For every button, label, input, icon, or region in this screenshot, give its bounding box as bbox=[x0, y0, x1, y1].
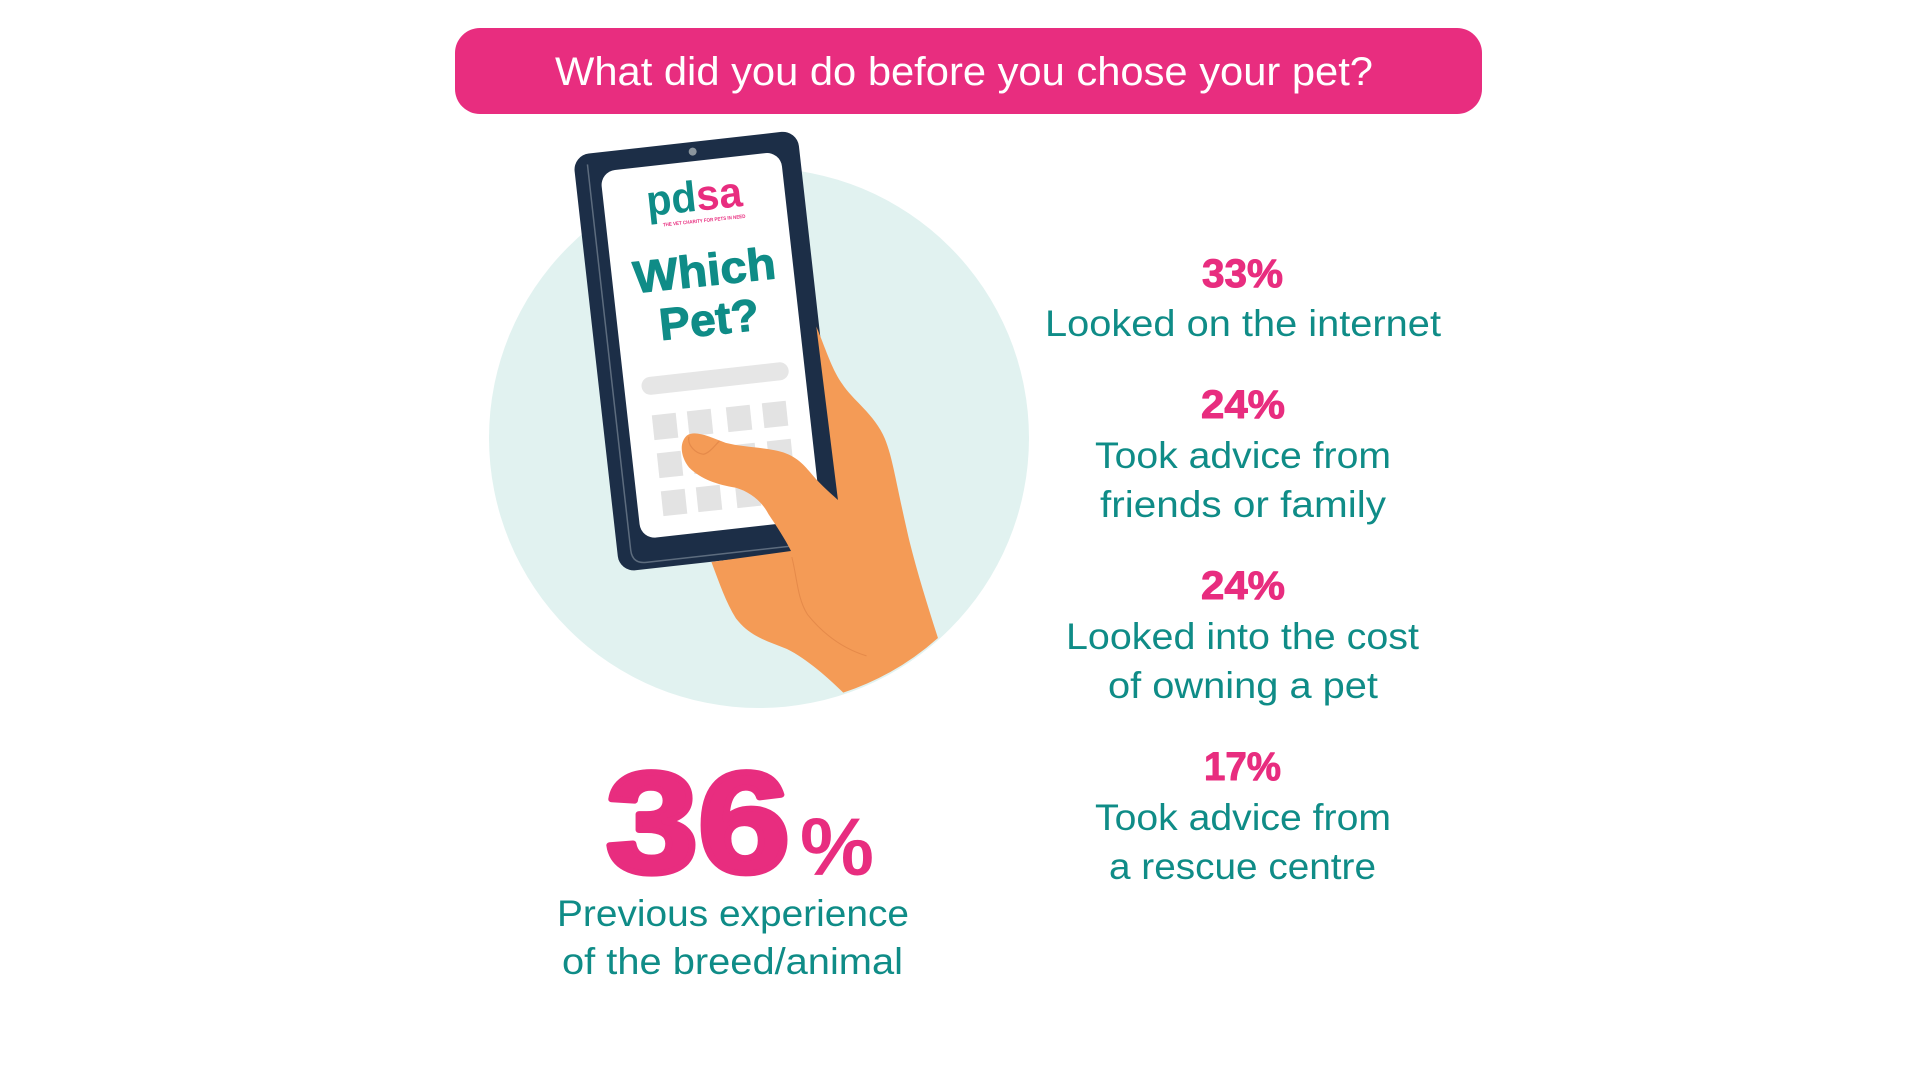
phone logo: pdsa: THE VET CHARITY FOR PETS IN NEED bbox=[663, 214, 746, 228]
stat: 17% rescue centre: 17% bbox=[1204, 745, 1281, 789]
stat: 24% friends or family: 24% bbox=[1201, 383, 1285, 427]
stat: 36% previous experience: 36 bbox=[606, 744, 790, 903]
hand bbox=[682, 327, 938, 693]
stat: 33% looked on the internet bbox=[1045, 252, 1442, 344]
phone heading: Which Pet?: Which bbox=[631, 237, 778, 303]
stat: 36% previous experience bbox=[557, 744, 909, 982]
stat: 24% cost of owning: of owning a pet bbox=[1108, 665, 1379, 706]
phone bbox=[573, 130, 844, 572]
phone logo: pdsa: sa bbox=[694, 168, 745, 221]
stat: 33% looked on the internet: Looked on the internet bbox=[1045, 303, 1442, 344]
phone logo: pdsa: pd bbox=[644, 173, 699, 226]
stat: 17% rescue centre: Took advice from bbox=[1095, 797, 1391, 838]
phone keypad tiles bbox=[652, 401, 793, 516]
illustration: hand holding phone bbox=[489, 130, 1029, 708]
stat: 24% cost of owning: Looked into the cost bbox=[1066, 616, 1420, 657]
stat: 36% previous experience: of the breed/animal bbox=[562, 941, 903, 982]
stat: 17% rescue centre: a rescue centre bbox=[1109, 846, 1376, 887]
stat: 24% friends or family bbox=[1095, 383, 1391, 525]
title banner: What did you do before you chose your pet? bbox=[555, 50, 1373, 94]
background circle bbox=[489, 168, 1029, 708]
stat: 17% rescue centre bbox=[1095, 745, 1391, 887]
phone heading: Which Pet? bbox=[631, 237, 778, 350]
phone logo: pdsa bbox=[644, 168, 746, 230]
phone heading: Which Pet?: Pet? bbox=[657, 289, 761, 350]
stat: 24% friends or family: friends or family bbox=[1100, 484, 1387, 525]
stat: 24% friends or family: Took advice from bbox=[1095, 435, 1391, 476]
stat: 24% cost of owning: 24% bbox=[1201, 564, 1285, 608]
stat: 33% looked on the internet: 33% bbox=[1202, 252, 1283, 296]
stat: 36% previous experience: Previous experience bbox=[557, 893, 909, 934]
stat: 36% previous experience: % bbox=[800, 802, 874, 893]
stat: 24% cost of owning bbox=[1066, 564, 1420, 706]
title banner bbox=[455, 28, 1482, 114]
